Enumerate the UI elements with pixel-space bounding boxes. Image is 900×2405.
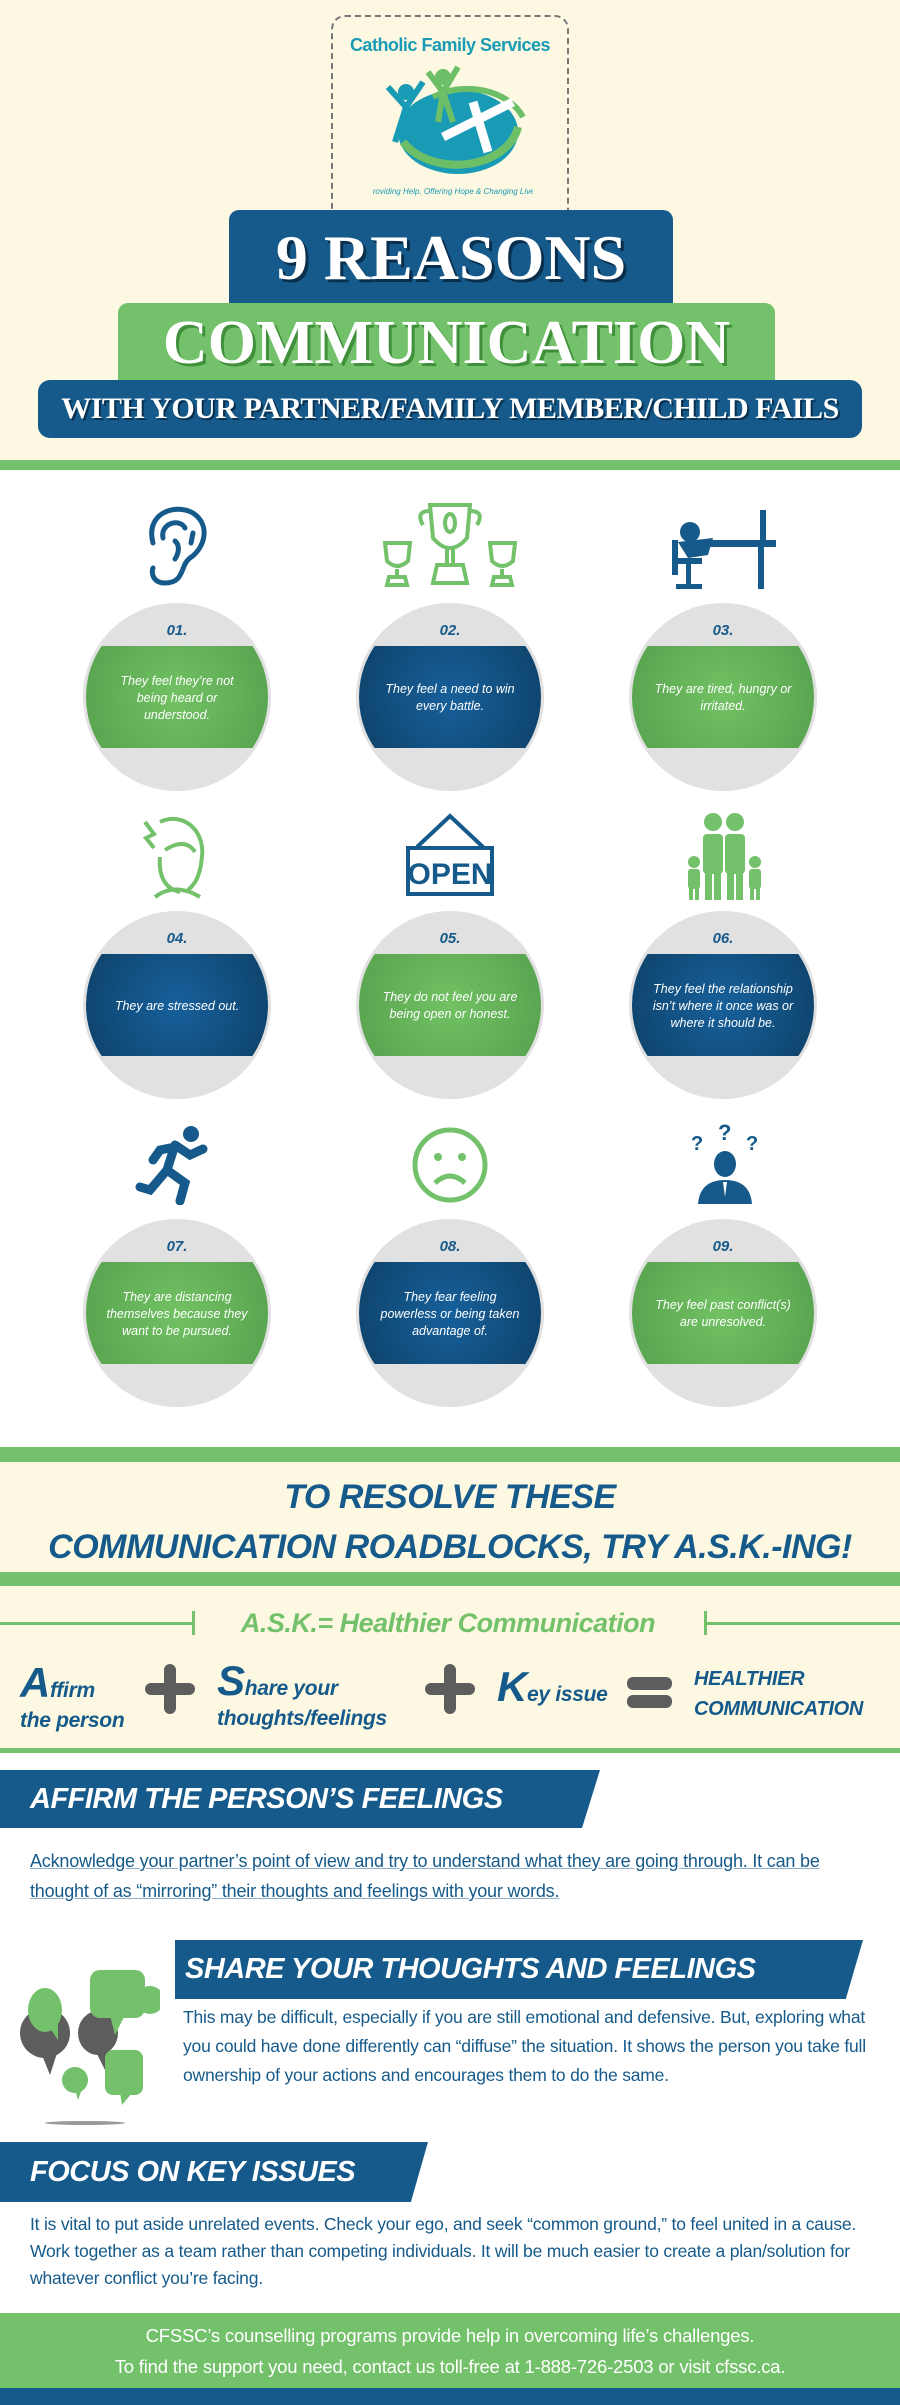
- resolve heading: [48, 1478, 852, 1566]
- icon: questioning person: ?: [746, 1133, 758, 1155]
- resolve heading: COMMUNICATION ROADBLOCKS, TRY A.S.K.-ING!: [48, 1528, 852, 1566]
- text: focus: It is vital to put aside unrelated events. Check your ego, and seek “common ground,” to feel united in a cause. Work together as a team rather than competing individuals. It will be much easier to create a plan/solution for whatever conflict you’re facing.: [30, 2214, 856, 2288]
- panel: reasons grid: [0, 470, 900, 1445]
- footer: To find the support you need, contact us toll-free at 1-888-726-2503 or visit cfssc.ca.: [115, 2356, 785, 2377]
- text: share: This may be difficult, especially if you are still emotional and defensive. But, exploring what you could have done differently can “diffuse” the situation. It shows the person you take full ownership of your actions and encourages them to do the same.: [183, 2007, 866, 2085]
- logo text: Catholic Family Services: [350, 35, 550, 55]
- icon: ear: [149, 506, 207, 586]
- icon: sad face: [412, 1128, 488, 1202]
- heading: focus: FOCUS ON KEY ISSUES: [30, 2156, 355, 2188]
- icon: speech bubbles: [20, 1970, 160, 2125]
- footer: [0, 2313, 900, 2388]
- card 01: [83, 603, 271, 791]
- title: subtitle: [38, 380, 862, 438]
- heading: share: [175, 1940, 863, 1999]
- ASK subheading: A.S.K.= Healthier Communication: [241, 1608, 655, 1638]
- card 09: 09.: [713, 1238, 733, 1255]
- card 09: [629, 1219, 817, 1407]
- card 02: They feel a need to win every battle.: [385, 682, 515, 713]
- card 03: They are tired, hungry or irritated.: [655, 682, 791, 713]
- card 08: 08.: [440, 1238, 460, 1255]
- card 08: [356, 1219, 544, 1407]
- logo box: [331, 15, 569, 215]
- title: subtitle: WITH YOUR PARTNER/FAMILY MEMBER/CHILD FAILS: [61, 392, 839, 425]
- card 01: They feel they’re not being heard or understood.: [120, 674, 234, 722]
- heading: share: SHARE YOUR THOUGHTS AND FEELINGS: [185, 1953, 756, 1985]
- card 07: 07.: [167, 1238, 187, 1255]
- icon: running: [136, 1126, 208, 1205]
- ASK equation: Share your: [217, 1657, 338, 1704]
- ASK equation: [19, 1657, 864, 1732]
- icon: open sign: OPEN: [407, 858, 493, 891]
- ASK equation: the person: [20, 1709, 124, 1732]
- ASK equation: HEALTHIER: [694, 1668, 804, 1690]
- card 08: They fear feeling powerless or being taken advantage of.: [380, 1290, 519, 1338]
- card 03: [629, 603, 817, 791]
- panel: resolve banner: [0, 1447, 900, 1752]
- card 05: They do not feel you are being open or honest.: [383, 990, 517, 1021]
- title: communication: COMMUNICATION: [163, 309, 730, 377]
- heading: focus: [0, 2142, 428, 2202]
- heading: affirm: [0, 1770, 600, 1828]
- title: 9 reasons: [229, 210, 673, 306]
- card 04: [83, 911, 271, 1099]
- card 05: [356, 911, 544, 1099]
- card 04: They are stressed out.: [115, 998, 239, 1012]
- icon: questioning person: [691, 1122, 758, 1204]
- heading: affirm: AFFIRM THE PERSON’S FEELINGS: [30, 1782, 503, 1814]
- ASK subheading: [0, 1608, 900, 1638]
- icon: open sign: [406, 813, 494, 896]
- icon: questioning person: ?: [691, 1133, 703, 1155]
- ASK equation: Key issue: [497, 1663, 608, 1710]
- card 05: 05.: [440, 930, 460, 947]
- card 07: They are distancing themselves because they want to be pursued.: [106, 1290, 248, 1338]
- card 06: 06.: [713, 930, 733, 947]
- footer: CFSSC’s counselling programs provide help in overcoming life’s challenges.: [146, 2325, 754, 2346]
- icon: stressed face: [143, 816, 204, 899]
- resolve heading: TO RESOLVE THESE: [284, 1478, 616, 1516]
- header background: [0, 0, 900, 470]
- ASK equation: thoughts/feelings: [217, 1707, 387, 1730]
- ASK equation: Affirm: [20, 1659, 95, 1706]
- icon: tired at desk: [672, 510, 776, 589]
- card 06: [629, 911, 817, 1099]
- text: affirm: Acknowledge your partner’s point of view and try to understand what they are going through. It can be thought of as “mirroring” their thoughts and feelings with your words.: [30, 1851, 820, 1901]
- card 03: 03.: [713, 622, 733, 639]
- card 07: [83, 1219, 271, 1407]
- ASK equation: COMMUNICATION: [694, 1698, 863, 1720]
- icon: trophies: [382, 503, 518, 587]
- card 04: 04.: [167, 930, 187, 947]
- logo emblem: [373, 66, 533, 196]
- card 02: [356, 603, 544, 791]
- card 02: 02.: [440, 622, 460, 639]
- card 06: They feel the relationship isn’t where it once was or where it should be.: [653, 982, 793, 1030]
- card 01: 01.: [167, 622, 187, 639]
- card 09: They feel past conflict(s) are unresolved.: [655, 1298, 791, 1329]
- icon: family: [688, 813, 761, 900]
- title: 9 reasons: 9 REASONS: [276, 222, 626, 293]
